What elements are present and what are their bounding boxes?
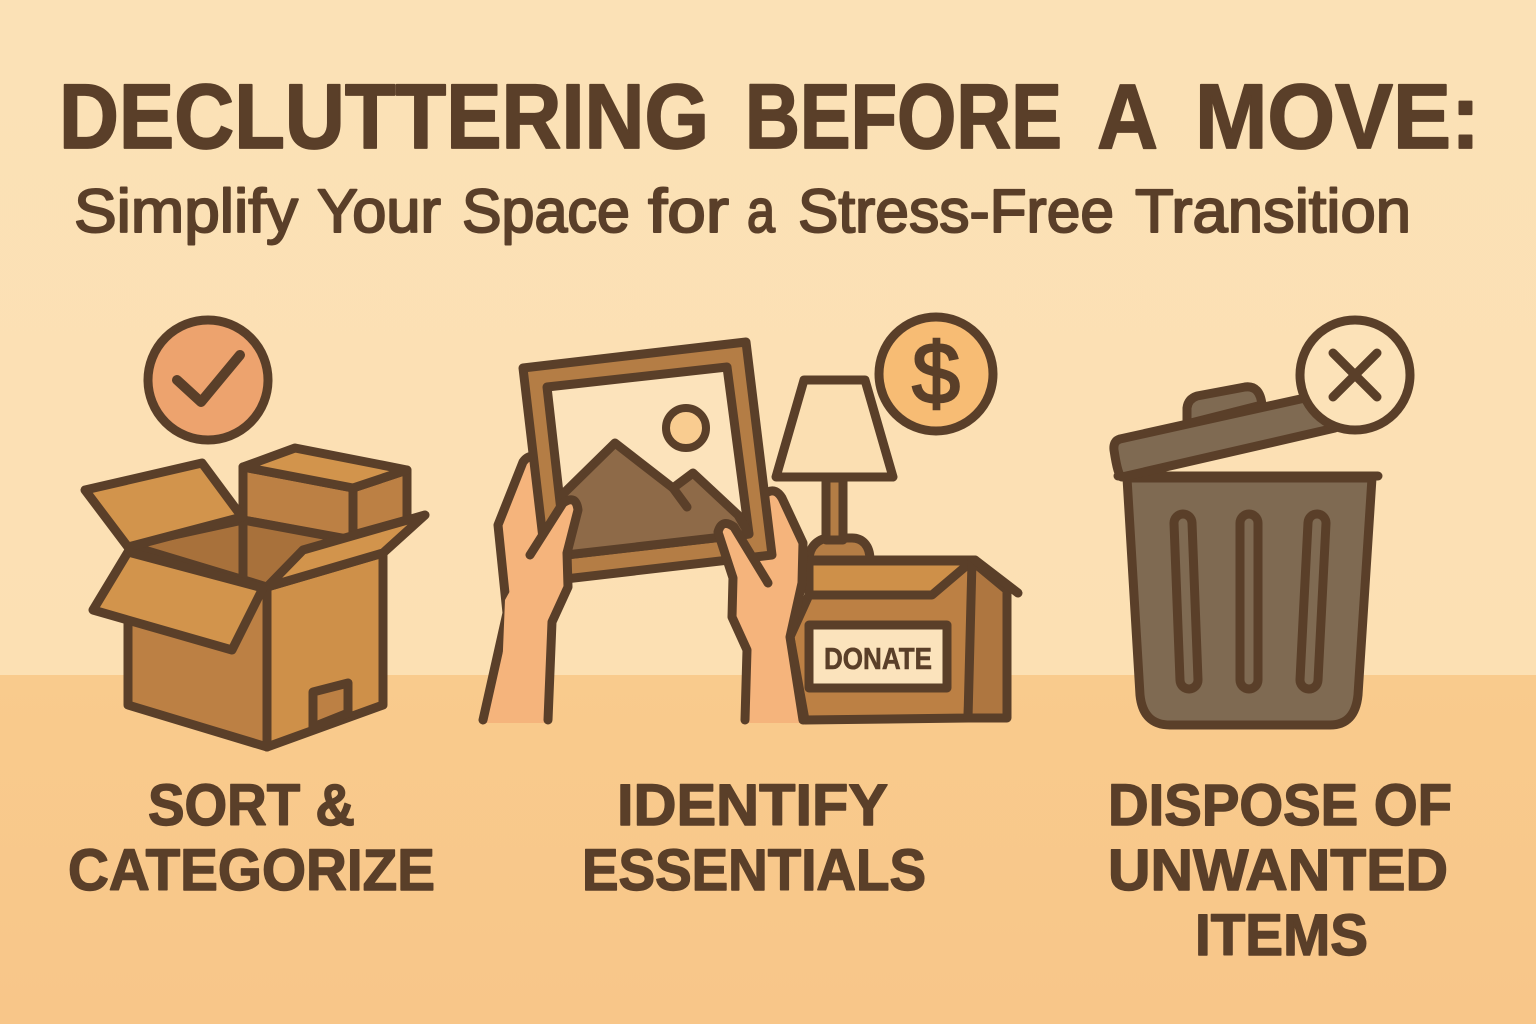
label: dispose of unwanted items: DISPOSE OF <box>1108 773 1452 838</box>
title: MOVE: <box>1195 66 1480 168</box>
icon: dollar coin <box>879 317 993 431</box>
subtitle: Space <box>462 177 630 245</box>
subtitle: Transition <box>1135 177 1411 245</box>
mountains <box>562 443 749 555</box>
label: identify essentials: ESSENTIALS <box>582 838 926 903</box>
label: dispose of unwanted items: ITEMS <box>1195 903 1368 968</box>
label: dispose of unwanted items: UNWANTED <box>1108 838 1448 903</box>
background floor <box>0 675 1536 1024</box>
icon: donate box <box>790 560 1018 720</box>
icon: check mark badge <box>148 320 268 440</box>
label: identify essentials <box>582 773 926 903</box>
title: DECLUTTERING <box>59 66 709 168</box>
label: sort and categorize: CATEGORIZE <box>68 838 435 903</box>
subtitle: Simplify <box>74 177 299 245</box>
icon: small box behind <box>243 448 407 540</box>
icon: dollar coin: $ <box>912 326 960 422</box>
background wall <box>0 0 1536 675</box>
icon: right thumb <box>718 523 790 723</box>
subtitle: Stress-Free <box>798 177 1114 245</box>
donate label: DONATE <box>824 641 932 676</box>
subtitle <box>74 177 1411 245</box>
panel: identify essentials illustration <box>483 317 1018 723</box>
icon: left hand back <box>483 456 552 723</box>
icon: open cardboard box <box>85 463 425 747</box>
panel: sort and categorize illustration <box>85 320 425 747</box>
icon: left thumb <box>500 500 578 723</box>
subtitle: for <box>648 177 729 245</box>
title: A <box>1097 66 1158 168</box>
icon: picture frame <box>523 342 772 581</box>
label: sort and categorize: SORT & <box>148 773 355 838</box>
icon: trash can lid <box>1114 387 1335 477</box>
icon: right hand back <box>745 491 803 723</box>
panel: dispose of unwanted items illustration <box>1114 320 1410 725</box>
icon: trash can body <box>1118 476 1378 725</box>
icon: trash can slots <box>1183 523 1317 680</box>
icon: x mark badge <box>1300 320 1410 430</box>
title <box>59 66 1480 168</box>
label: sort and categorize <box>68 773 435 903</box>
icon: table lamp <box>776 380 893 560</box>
label: identify essentials: IDENTIFY <box>617 773 888 838</box>
sun <box>666 408 706 448</box>
label: dispose of unwanted items <box>1108 773 1452 968</box>
subtitle: a <box>747 177 775 245</box>
subtitle: Your <box>317 177 441 245</box>
title: BEFORE <box>745 66 1062 168</box>
